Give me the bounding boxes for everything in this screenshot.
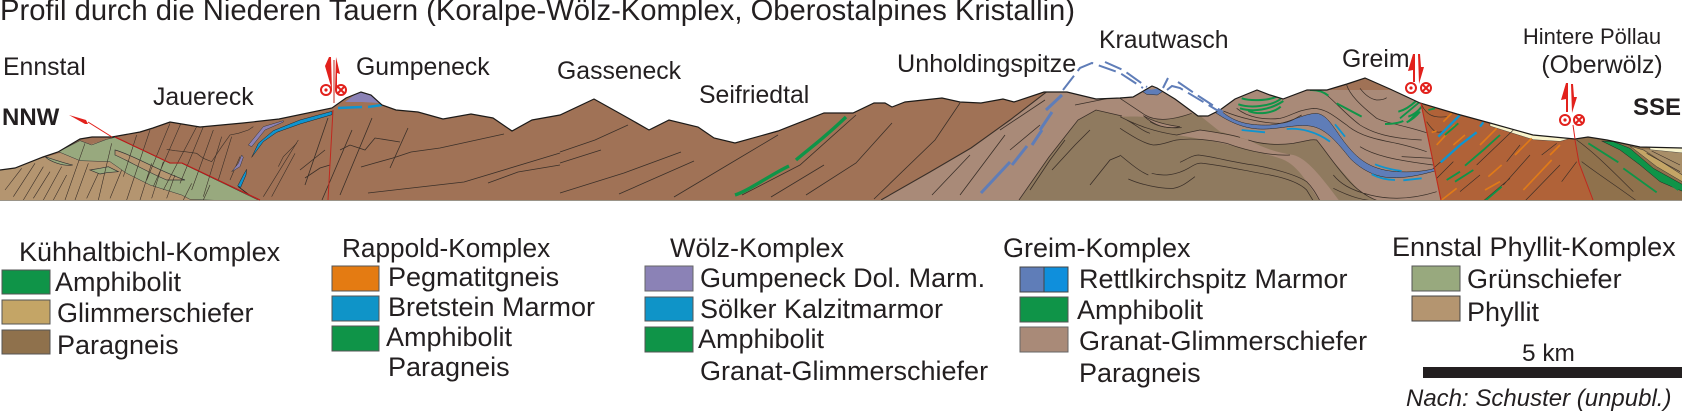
Greim contour lines (1120, 85, 1437, 201)
label: Hintere Pöllau: Hintere Pöllau (1523, 24, 1661, 49)
greenschist blobs (45, 157, 118, 174)
dark thrust tail (238, 187, 249, 195)
Krautwasch cap (1148, 86, 1156, 90)
label: Seifriedtal: Seifriedtal (699, 82, 809, 109)
folds in Wölz (167, 127, 297, 167)
legend: Rappold-Komplex: Rappold-Komplex (342, 233, 550, 263)
legend: Kühhaltbichl-Komplex: Glimmerschiefer (57, 298, 254, 328)
legend: Rappold-Komplex: Pegmatitgneis (388, 262, 559, 292)
Wölz purple lenses (232, 121, 283, 172)
greenschist band (58, 137, 260, 201)
cross section (0, 54, 1682, 202)
Greim section (1120, 85, 1437, 202)
legend: Rappold-Komplex: Bretstein Marmor (388, 292, 595, 322)
unit: Rappold (1420, 102, 1594, 202)
label: Ennstal: Ennstal (3, 54, 86, 81)
Greim paragneiss (1120, 113, 1378, 202)
eastern section (1400, 102, 1682, 202)
legend: Rappold-Komplex (332, 233, 595, 382)
legend: Kühhaltbichl-Komplex: Amphibolit (55, 267, 182, 297)
legend: Rappold-Komplex: Paragneis (388, 352, 510, 382)
phyllite lens (115, 150, 185, 180)
legend: Ennstal Phyllit-Komplex: Ennstal Phyllit-Komplex (1392, 232, 1676, 262)
unit: cream strips (1490, 122, 1682, 153)
light wedge (1143, 116, 1180, 128)
legend: Wölz-Komplex: Gumpeneck Dol. Marm. (700, 263, 985, 293)
unit: Wölz wedge (971, 90, 1049, 148)
label: Greim: Greim (1342, 46, 1410, 73)
unit: Wölz base (40, 78, 1594, 200)
unit: amphibolite band (1602, 141, 1682, 192)
fault symbol: Gumpeneck (321, 57, 346, 95)
legend: Kühhaltbichl-Komplex (2, 237, 281, 360)
unit: micaschist band (1630, 146, 1682, 182)
unit: Kühhaltbichl paragneiss (1575, 137, 1682, 202)
legend: Greim-Komplex: Granat-Glimmerschiefer (1079, 326, 1367, 356)
phyllite (0, 142, 258, 200)
Rappold amphibolite lenses (1400, 102, 1678, 201)
fault symbol: Hintere Pöllau (1560, 83, 1584, 139)
unit: western Greim dome (1019, 110, 1122, 201)
Wölz amphibolite lenses (735, 117, 846, 195)
foliation ticks (5, 122, 298, 200)
unit: Greim garnet micaschist base (878, 90, 1445, 201)
legend: Rappold-Komplex: Amphibolit (386, 322, 513, 352)
Greim blue lenses (1242, 124, 1422, 180)
legend: Ennstal Phyllit-Komplex (1392, 232, 1676, 327)
label: NNW: NNW (2, 104, 60, 131)
label: Krautwasch: Krautwasch (1099, 27, 1229, 54)
uplifted dashed marble (1063, 62, 1223, 112)
legend: Wölz-Komplex (645, 233, 988, 386)
faults (328, 60, 1593, 200)
Rappold lines (1422, 105, 1680, 201)
legend: Greim-Komplex: Amphibolit (1077, 295, 1204, 325)
legend: Wölz-Komplex: Wölz-Komplex (670, 233, 845, 263)
legend: Greim-Komplex: Rettlkirchspitz Marmor (1079, 264, 1348, 294)
scale bar: 5 km (1522, 340, 1575, 367)
Rappold blue lenses (1438, 115, 1483, 162)
legend: Kühhaltbichl-Komplex: Paragneis (57, 330, 179, 360)
unit: Gumpeneck marble (345, 92, 379, 103)
label: Oberwölz: (Oberwölz) (1541, 52, 1663, 79)
arrow: NNW direction (69, 115, 112, 137)
topography outline (0, 78, 1682, 170)
unit: upper Kühhaltbichl (1643, 149, 1682, 175)
Wölz small marble lenses (338, 105, 382, 108)
fault symbol: Greim (1406, 54, 1431, 93)
Krautwasch marble (1143, 88, 1162, 96)
light band (1177, 130, 1340, 202)
Rappold orange lenses (1432, 113, 1560, 200)
label: Gasseneck: Gasseneck (557, 58, 682, 85)
Greim dashed marble lenses (981, 95, 1062, 193)
legend: Kühhaltbichl-Komplex: Kühhaltbichl-Komplex (19, 237, 281, 267)
base line (0, 200, 1682, 201)
Greim amphibolite folds (1238, 90, 1422, 124)
central Wölz lines (300, 90, 1122, 200)
legend: Ennstal Phyllit-Komplex: Phyllit (1467, 297, 1540, 327)
western section (0, 111, 332, 202)
scale bar (1423, 340, 1682, 378)
label: Unholdingspitze: Unholdingspitze (897, 50, 1076, 78)
label: SSE: SSE (1633, 94, 1681, 121)
legend: Ennstal Phyllit-Komplex: Grünschiefer (1467, 264, 1622, 294)
legend: Greim-Komplex: Paragneis (1079, 358, 1201, 388)
legend: Wölz-Komplex: Granat-Glimmerschiefer (700, 356, 988, 386)
legend: Wölz-Komplex: Amphibolit (698, 324, 825, 354)
Greim marble band (1215, 110, 1435, 178)
legend: Wölz-Komplex: Sölker Kalzitmarmor (700, 294, 943, 324)
place labels (2, 24, 1681, 131)
thrust fault (115, 137, 260, 200)
Wölz calcite marble (238, 111, 332, 187)
label: Gumpeneck: Gumpeneck (356, 54, 490, 81)
legend: Greim-Komplex: Greim-Komplex (1003, 233, 1191, 263)
legend: Greim-Komplex (1003, 233, 1367, 388)
label: Jauereck: Jauereck (153, 84, 254, 111)
rock units (0, 78, 1682, 201)
